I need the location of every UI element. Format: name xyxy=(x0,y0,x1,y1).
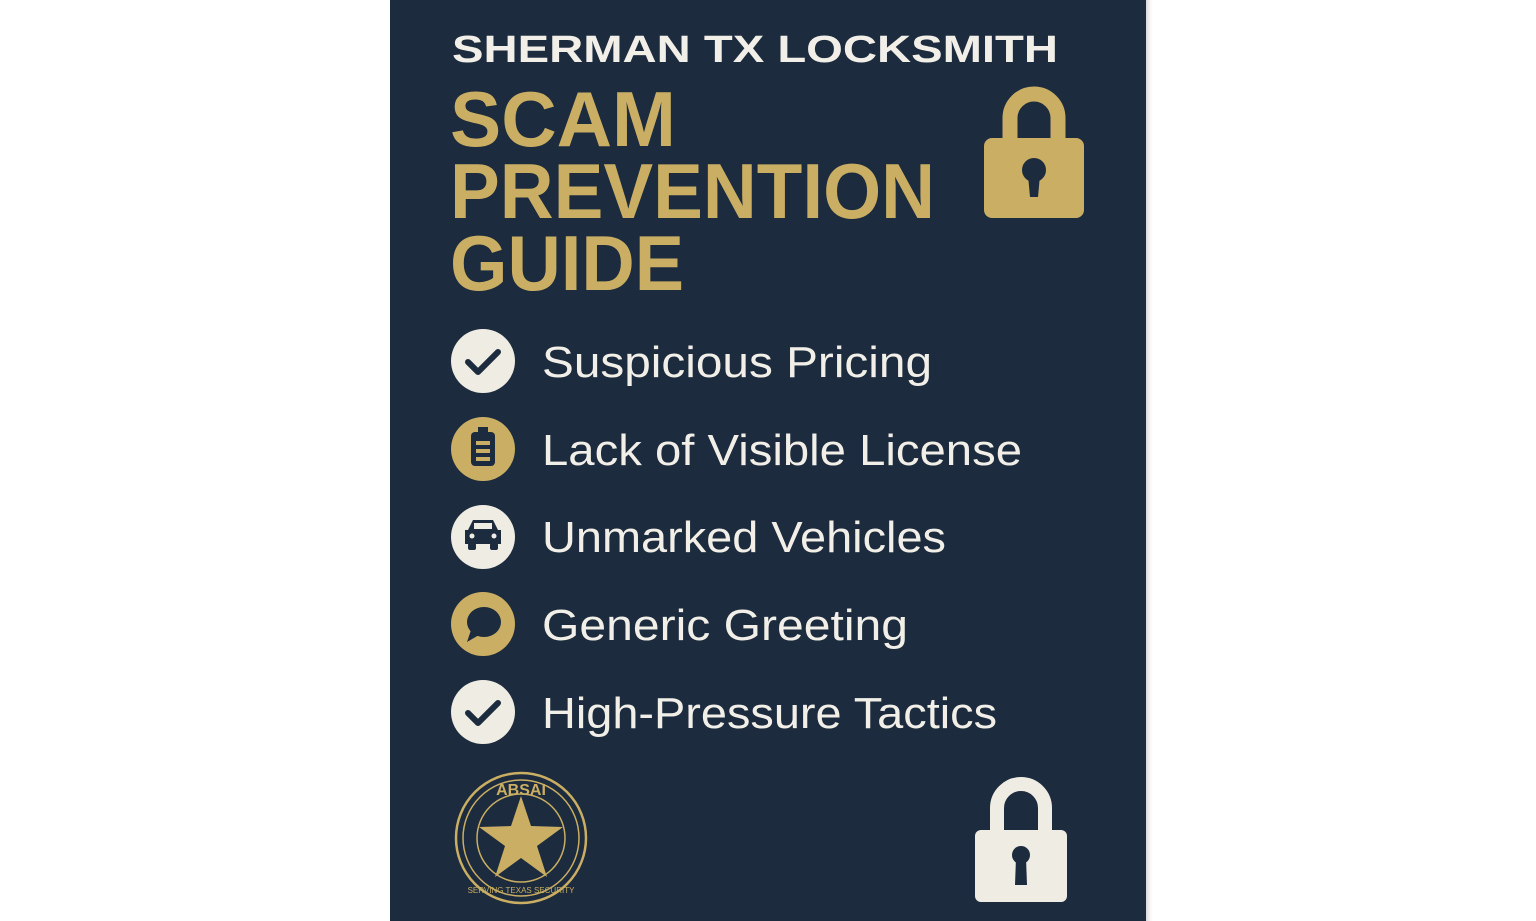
icon: cream padlock xyxy=(975,784,1067,902)
heading: Sherman TX Locksmith: SHERMAN TX LOCKSMITH xyxy=(452,29,1058,71)
title: Scam Prevention Guide xyxy=(450,75,935,307)
icon: seal xyxy=(456,773,586,903)
title: Scam Prevention Guide: PREVENTION xyxy=(450,147,935,235)
item: generic greeting: Generic Greeting xyxy=(542,601,908,650)
item: unmarked vehicles xyxy=(451,505,946,569)
item: unmarked vehicles: Unmarked Vehicles xyxy=(542,513,946,562)
item: generic greeting xyxy=(451,592,908,656)
panel: background xyxy=(390,0,1146,921)
item: suspicious pricing: Suspicious Pricing xyxy=(542,338,932,387)
item: suspicious pricing xyxy=(451,329,932,393)
title: Scam Prevention Guide: GUIDE xyxy=(450,219,684,307)
item: high-pressure tactics: High-Pressure Tactics xyxy=(542,689,997,738)
item: lack of visible license: Lack of Visible License xyxy=(542,426,1022,475)
icon: seal: ABSAI xyxy=(496,782,546,799)
icon: gold padlock xyxy=(984,94,1084,218)
item: lack of visible license xyxy=(451,417,1022,481)
item: high-pressure tactics xyxy=(451,680,997,744)
icon: seal: SERVING TEXAS SECURITY xyxy=(468,886,575,895)
title: Scam Prevention Guide: SCAM xyxy=(450,75,676,163)
list: warning signs xyxy=(451,329,1022,744)
